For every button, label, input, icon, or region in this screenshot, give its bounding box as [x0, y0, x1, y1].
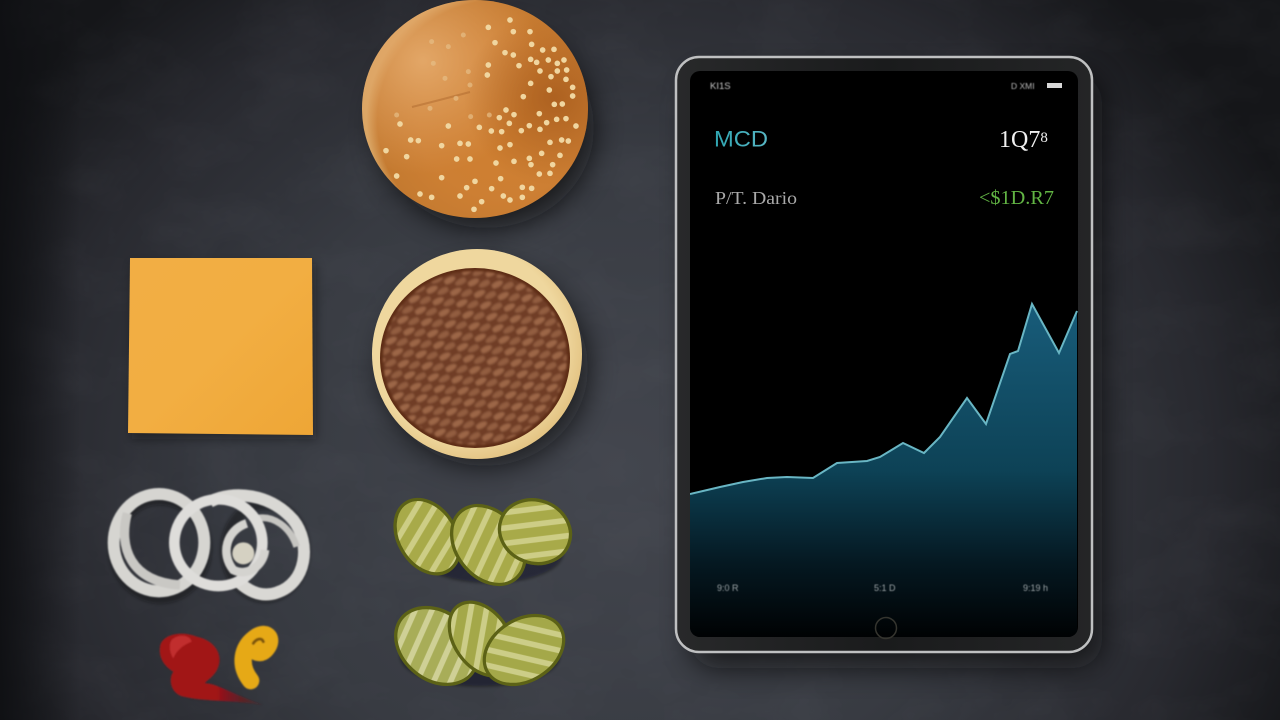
price: 1Q7 — [999, 127, 1040, 153]
tablet frame — [676, 57, 1092, 652]
onion rings — [114, 494, 305, 598]
left ring — [114, 494, 204, 591]
pickle slices, top row — [382, 488, 580, 599]
pickle 1 — [382, 488, 473, 586]
sesame bun top — [362, 0, 594, 228]
x-axis labels: 9:0 R — [717, 583, 739, 593]
home button — [876, 618, 896, 638]
right ring — [210, 495, 304, 594]
cheese slice — [128, 258, 316, 439]
beef patty on bun — [372, 249, 588, 466]
middle ring — [174, 499, 262, 586]
status bar icons — [1011, 81, 1062, 91]
status bar time: KI1S — [710, 81, 731, 92]
price: 8 — [1040, 130, 1048, 146]
x-axis labels — [717, 583, 1048, 593]
tablet — [676, 57, 1102, 668]
sesame seeds — [386, 20, 576, 209]
pickle 2 — [436, 491, 540, 599]
area chart — [690, 304, 1077, 637]
ratio label: P/T. Dario — [715, 188, 797, 208]
pickle 4 — [381, 592, 493, 700]
ticker: MCD — [714, 126, 768, 152]
pickle slices, bottom row — [381, 590, 576, 700]
ratio value: <$1D.R7 — [979, 187, 1054, 209]
pickle 5 — [436, 590, 527, 688]
patty — [380, 268, 570, 448]
ketchup dollop — [160, 634, 263, 705]
x-axis labels: 5:1 D — [874, 583, 896, 593]
tablet screen — [690, 71, 1078, 638]
pickle 6 — [472, 601, 576, 699]
inner onion curl — [226, 523, 265, 572]
mustard squiggle — [243, 634, 270, 681]
x-axis labels: 9:19 h — [1023, 583, 1048, 593]
status bar icons: D XMI — [1011, 81, 1035, 91]
pickle 3 — [490, 490, 580, 573]
